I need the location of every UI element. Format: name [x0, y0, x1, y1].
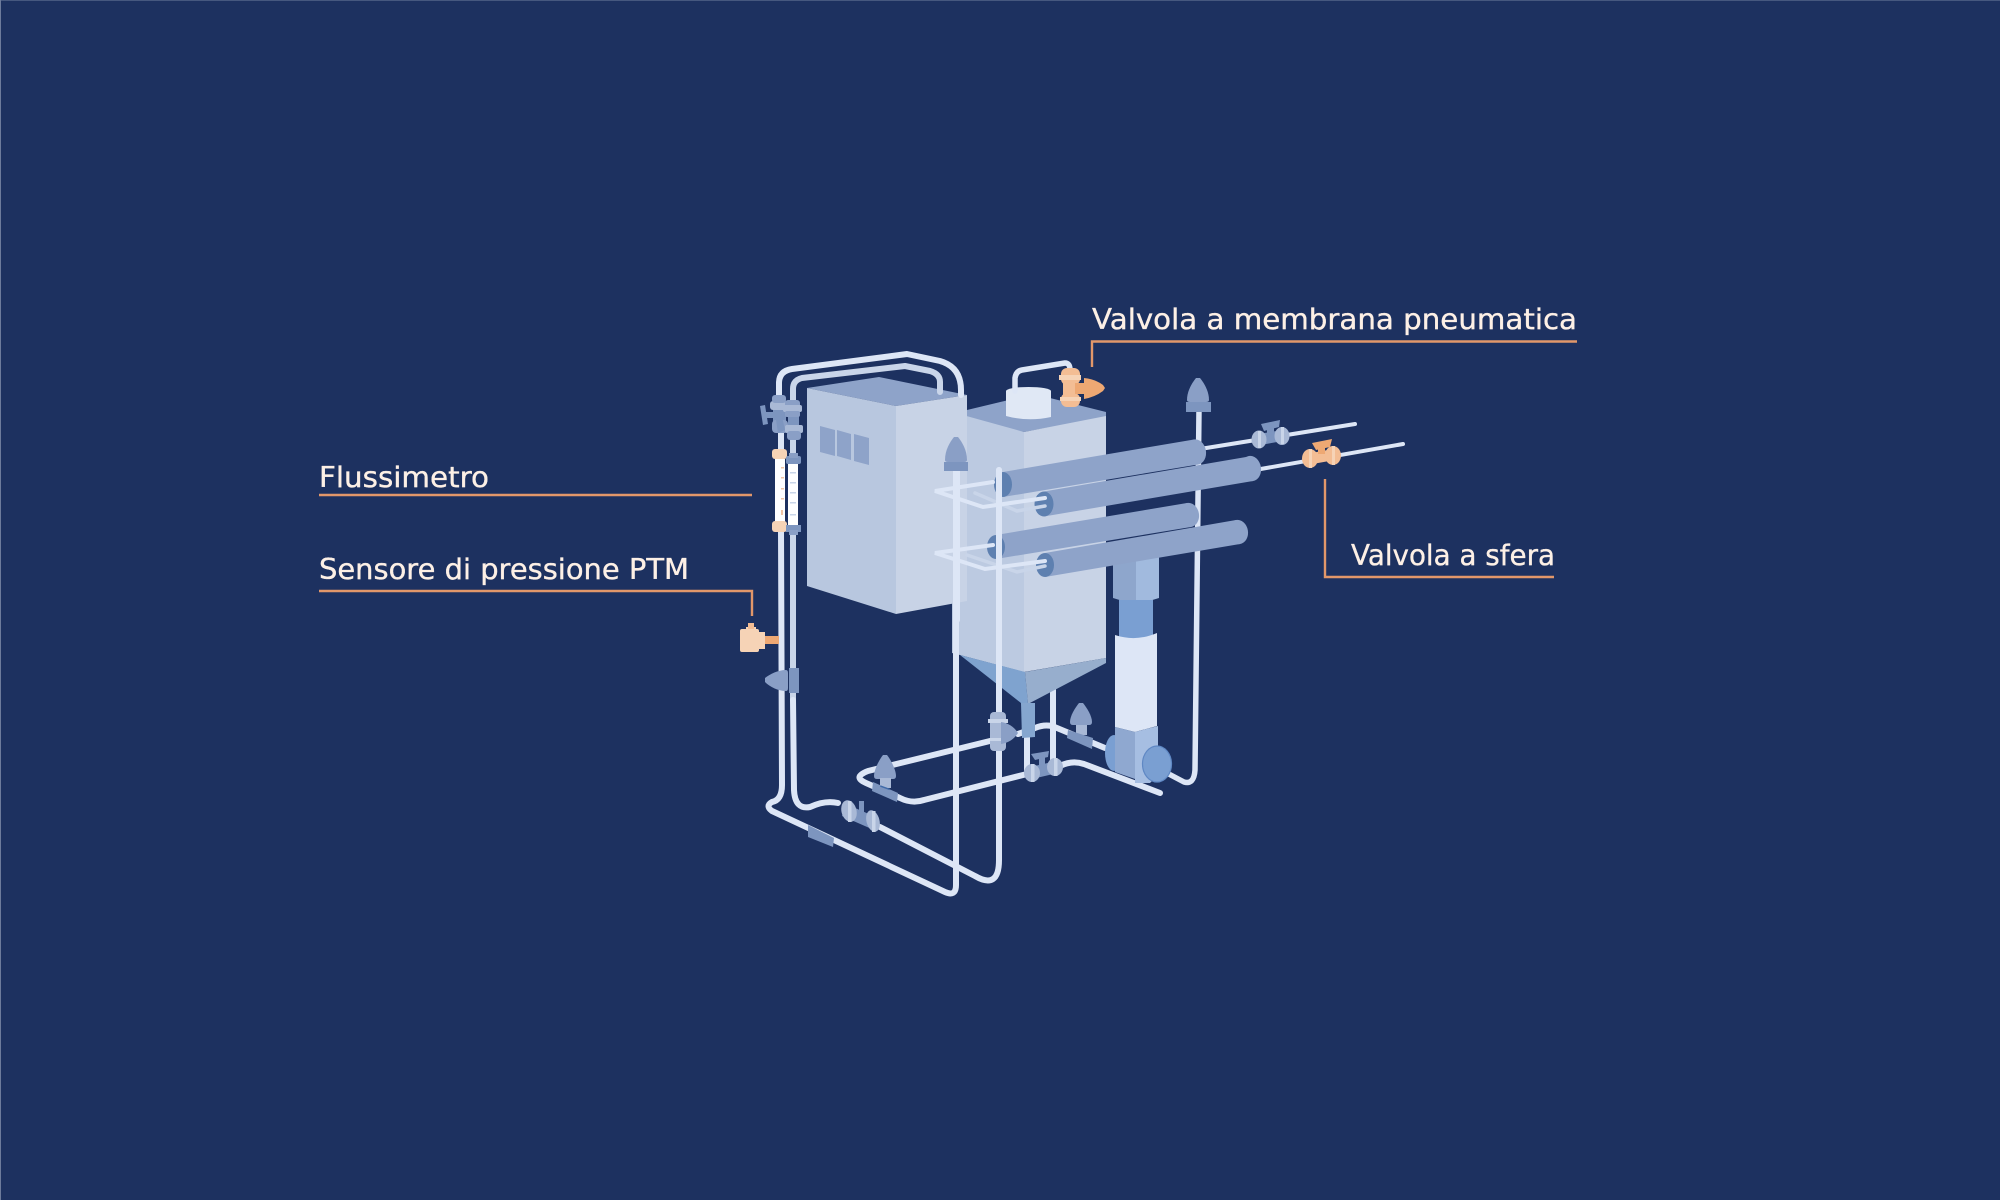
tube holder, lower — [935, 545, 1045, 572]
lower manifold pipe — [859, 726, 1160, 802]
tank top — [967, 394, 1106, 432]
pump base right face — [1135, 726, 1158, 783]
hopper spout — [1021, 703, 1035, 738]
cabinet top — [807, 377, 967, 406]
icon: lower left ball valve — [839, 798, 882, 833]
label: Valvola a sfera — [1325, 479, 1555, 577]
icon: left valve group — [760, 395, 803, 440]
icon: ball valve, highlighted — [1302, 439, 1341, 468]
pipe sleeve — [808, 825, 834, 847]
icon: membrane valve at hopper — [988, 712, 1018, 751]
icon: ball valve under hopper — [1024, 751, 1063, 782]
icon: pneumatic membrane valve (highlighted) — [1059, 368, 1105, 407]
tank cap — [1006, 387, 1051, 419]
label: Valvola a membrana pneumatica: Valvola a membrana pneumatica — [1092, 303, 1577, 336]
heat exchanger tube 3 — [987, 501, 1201, 559]
heat exchanger tube 4 — [1036, 518, 1250, 577]
icon: membrane valve on lower manifold, right — [1067, 703, 1093, 749]
icon: flowmeter, highlighted — [772, 449, 787, 532]
top right pipe, lower — [1255, 444, 1403, 470]
tank right face — [1024, 416, 1106, 672]
heat exchanger tube 2 — [1034, 454, 1263, 516]
tube holder, upper — [935, 482, 1045, 511]
pump base left face — [1115, 727, 1135, 779]
pump upper housing — [1113, 550, 1136, 605]
left vertical pipe, outer — [768, 430, 956, 893]
tank left face — [952, 412, 1024, 672]
cabinet front face — [807, 388, 896, 614]
pipe from tank cap to orange valve — [1015, 363, 1070, 391]
right vertical return pipe — [1165, 410, 1199, 782]
icon: flowmeter, blue — [786, 453, 801, 535]
label: Valvola a sfera: Valvola a sfera — [1351, 539, 1555, 572]
pump blue column — [1119, 600, 1153, 642]
label: Sensore di pressione PTM: Sensore di pressione PTM — [319, 553, 689, 586]
plant diagram — [740, 354, 1403, 893]
label: Flussimetro: Flussimetro — [319, 461, 489, 494]
pump white cylinder — [1115, 633, 1157, 732]
cabinet side face — [896, 395, 967, 614]
label: Valvola a membrana pneumatica — [1092, 303, 1577, 367]
top pipe, outer — [779, 354, 961, 400]
inner pipe lower run — [793, 470, 999, 880]
top right pipe, upper — [1200, 424, 1355, 449]
short verticals under tank — [1027, 690, 1053, 770]
pump assembly — [1105, 545, 1172, 783]
icon: ball valve, upper right — [1252, 420, 1290, 448]
heat exchanger tube 1 — [994, 438, 1208, 497]
front vertical pipes over tubes — [957, 470, 999, 620]
icon: PTM pressure sensor (highlighted) — [740, 623, 779, 652]
hopper cone — [960, 655, 1028, 704]
top pipe, inner — [793, 366, 940, 402]
left vertical pipe, inner — [790, 436, 796, 700]
pump rear port — [1105, 735, 1123, 771]
icon: membrane valve on lower manifold, left — [872, 755, 898, 802]
control cabinet — [807, 377, 967, 614]
label: Sensore di pressione PTM — [319, 553, 752, 616]
membrane valve, front vertical pipe cap — [944, 437, 968, 471]
cabinet windows — [820, 426, 869, 465]
membrane valve, right vertical pipe cap — [1186, 378, 1211, 412]
pump front port — [1142, 746, 1172, 782]
tank — [952, 387, 1106, 738]
icon: horizontal membrane valve on left pipes — [765, 668, 799, 693]
